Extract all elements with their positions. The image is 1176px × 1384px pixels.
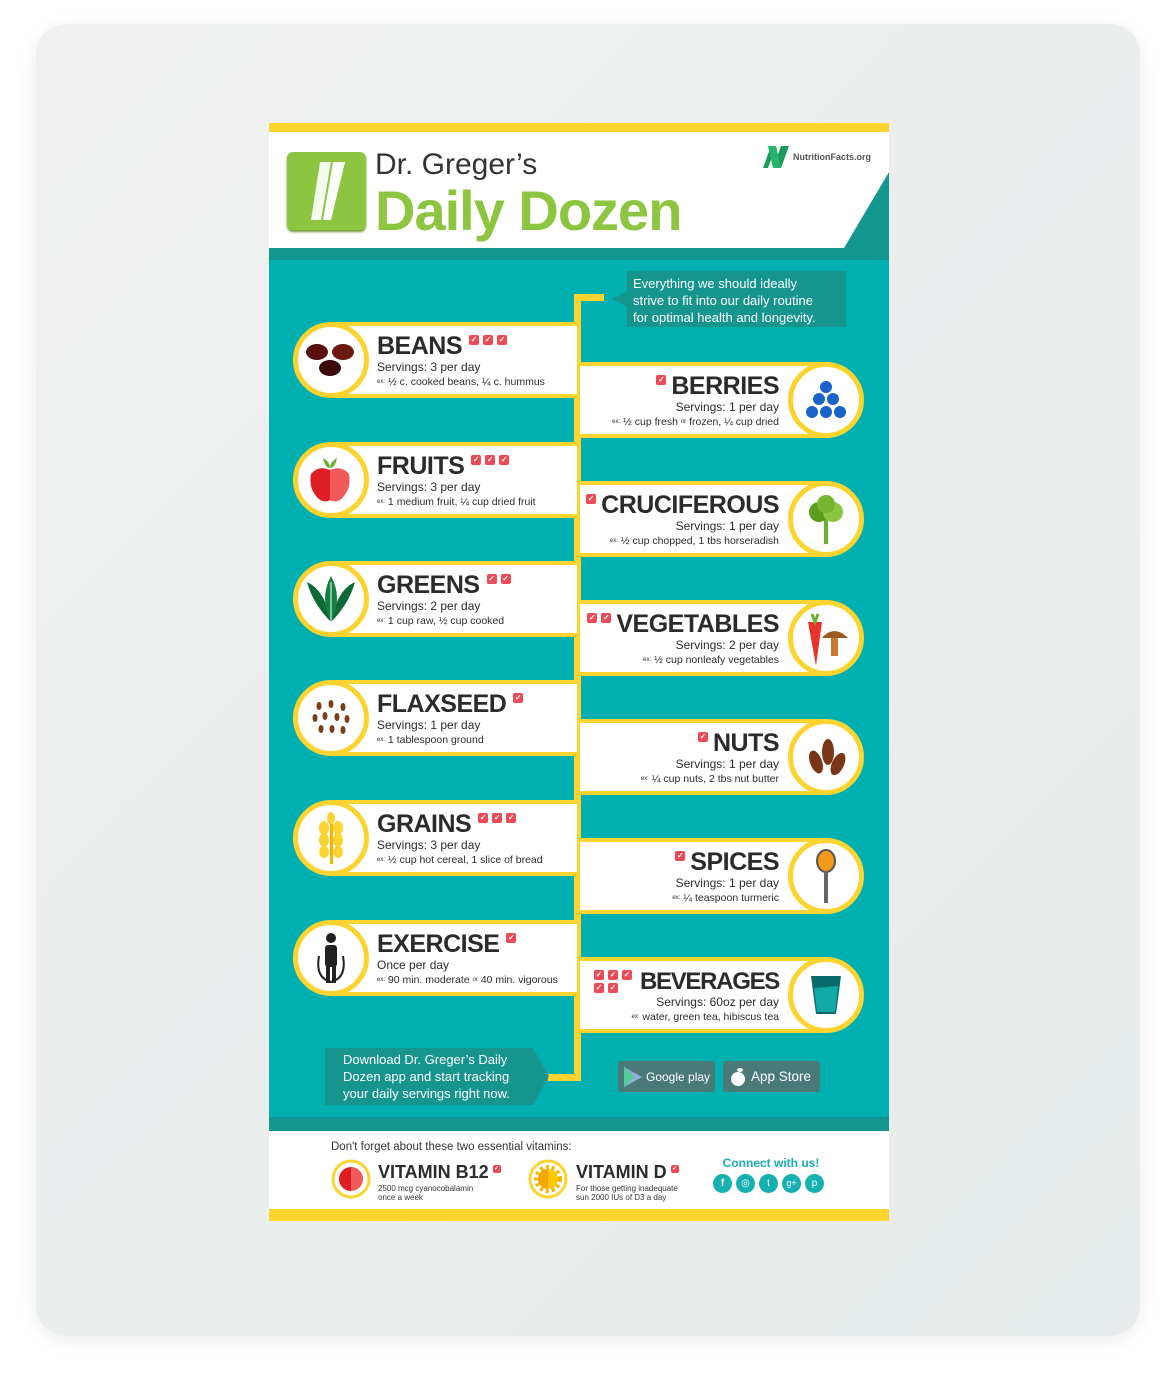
card: grains [293, 800, 577, 876]
card: berries: ✓ [658, 375, 665, 384]
card: berries: BERRIES [671, 372, 779, 400]
card: spices: ✓ [677, 851, 684, 860]
card: beverages: BEVERAGES [640, 968, 779, 995]
card: exercise: ✓ [508, 933, 515, 942]
card: spices: Servings: 1 per day [676, 876, 779, 890]
card: beans [293, 322, 577, 398]
card: greens [293, 561, 577, 637]
card: beans: BEANS [377, 332, 462, 360]
vitamin d: sun 2000 IUs of D3 a day [576, 1193, 666, 1202]
social: t [767, 1178, 770, 1189]
callout bottom: your daily servings right now. [343, 1086, 510, 1101]
card: fruits: FRUITS [377, 452, 464, 480]
card: grains: ✓ [480, 813, 487, 822]
card: vegetables: ✓ [603, 613, 610, 622]
card: fruits [293, 442, 577, 518]
NutritionFacts logo [763, 146, 871, 168]
card: beans: ex: ½ c. cooked beans, ¼ c. hummus [377, 376, 545, 388]
card: beans: Servings: 3 per day [377, 360, 480, 374]
button: app store [723, 1061, 820, 1092]
card: greens: ✓ [502, 574, 509, 583]
top yellow stripe [269, 123, 889, 132]
card: vegetables [580, 600, 864, 676]
callout bottom: Dozen app and start tracking [343, 1069, 509, 1084]
card: flaxseed: Servings: 1 per day [377, 718, 480, 732]
card: grains: ex: ½ cup hot cereal, 1 slice of bread [377, 854, 543, 866]
social: g+ [786, 1178, 797, 1188]
card: exercise [293, 920, 577, 996]
card: beans: ✓ [485, 335, 491, 344]
social: Connect with us! [723, 1156, 819, 1170]
card: nuts: NUTS [713, 729, 779, 757]
vitamin d: ✓ [672, 1166, 677, 1172]
footer [269, 1117, 889, 1221]
card: cruciferous: ex: ½ cup chopped, 1 tbs horseradish [610, 535, 779, 547]
vitamin b12: ✓ [494, 1166, 499, 1172]
card: grains: Servings: 3 per day [377, 838, 480, 852]
card: flaxseed: FLAXSEED [377, 690, 506, 718]
card: exercise: ex: 90 min. moderate or 40 min. vigorous [377, 974, 558, 986]
vitamin b12: 2500 mcg cyanocobalamin [378, 1184, 473, 1193]
card: spices: ex: ¼ teaspoon turmeric [672, 892, 779, 904]
card: vegetables: VEGETABLES [616, 610, 779, 638]
vitamin d: For those getting inadequate [576, 1184, 678, 1193]
card: grains: GRAINS [377, 810, 471, 838]
card: beverages: Servings: 60oz per day [656, 995, 779, 1009]
social: f [721, 1178, 724, 1189]
social: ◎ [741, 1178, 750, 1189]
card: beverages [580, 957, 864, 1033]
card: grains: ✓ [494, 813, 501, 822]
card: spices: SPICES [690, 848, 779, 876]
card: beverages: ✓ [610, 983, 616, 992]
card: nuts: ✓ [700, 732, 706, 741]
card: nuts: Servings: 1 per day [676, 757, 779, 771]
card: exercise: EXERCISE [377, 930, 499, 958]
card: fruits: ex: 1 medium fruit, ¼ cup dried fruit [377, 496, 536, 508]
card: fruits: ✓ [501, 455, 508, 464]
card: spices [580, 838, 864, 914]
title: Dr. Greger’s [375, 148, 537, 181]
card: beverages: ✓ [596, 983, 602, 992]
card: berries [580, 362, 864, 438]
card: greens: Servings: 2 per day [377, 599, 480, 613]
card: beans: ✓ [499, 335, 505, 344]
card: flaxseed [293, 680, 577, 756]
card: cruciferous: ✓ [588, 494, 594, 503]
card: vegetables: Servings: 2 per day [676, 638, 779, 652]
card: greens: ✓ [488, 574, 495, 583]
card: exercise: Once per day [377, 958, 449, 972]
social [713, 1156, 824, 1193]
card: beverages: ✓ [610, 970, 616, 979]
poster [269, 123, 889, 1221]
card: berries: Servings: 1 per day [676, 400, 779, 414]
card: vegetables: ex: ½ cup nonleafy vegetables [643, 654, 779, 666]
card: beverages: ex: water, green tea, hibiscus tea [631, 1011, 779, 1023]
card: fruits: ✓ [487, 455, 494, 464]
button: google play: Google play [646, 1070, 710, 1084]
NutritionFacts logo: NutritionFacts.org [793, 152, 871, 162]
callout top [612, 271, 846, 327]
callout top: strive to fit into our daily routine [633, 293, 813, 308]
social: p [812, 1178, 817, 1189]
vitamin b12: VITAMIN B12 [378, 1162, 489, 1182]
card: grains: ✓ [508, 813, 515, 822]
card: fruits: Servings: 3 per day [377, 480, 480, 494]
vitamin d: VITAMIN D [576, 1162, 667, 1182]
card: berries: ex: ½ cup fresh or frozen, ¼ cup dried [612, 416, 779, 428]
card: nuts [580, 719, 864, 795]
card: cruciferous [580, 481, 864, 557]
card: cruciferous: Servings: 1 per day [676, 519, 779, 533]
header: Daily Dozen [375, 179, 681, 242]
card: fruits: ✓ [473, 455, 480, 464]
footer: Don't forget about these two essential vitamins: [331, 1141, 572, 1153]
vitamin b12 [332, 1160, 501, 1202]
timeline line [574, 294, 581, 1081]
callout bottom [325, 1048, 549, 1105]
vitamin d [528, 1160, 679, 1202]
callout top: for optimal health and longevity. [633, 310, 816, 325]
callout top: Everything we should ideally [633, 276, 797, 291]
card: flaxseed: ex: 1 tablespoon ground [377, 734, 484, 746]
card: greens: GREENS [377, 571, 480, 599]
card: nuts: ex: ¼ cup nuts, 2 tbs nut butter [641, 773, 779, 785]
vitamin b12: once a week [378, 1193, 423, 1202]
card: cruciferous: CRUCIFEROUS [601, 491, 779, 519]
card: beverages: ✓ [596, 970, 602, 979]
button: app store: App Store [751, 1069, 811, 1084]
card: flaxseed: ✓ [515, 693, 522, 702]
card: beans: ✓ [471, 335, 477, 344]
header [269, 132, 889, 260]
button: google play [618, 1061, 715, 1092]
card: beverages: ✓ [624, 970, 630, 979]
callout bottom: Download Dr. Greger’s Daily [343, 1052, 507, 1067]
card: vegetables: ✓ [589, 613, 596, 622]
card: greens: ex: 1 cup raw, ½ cup cooked [377, 615, 504, 627]
logo check [287, 152, 366, 230]
